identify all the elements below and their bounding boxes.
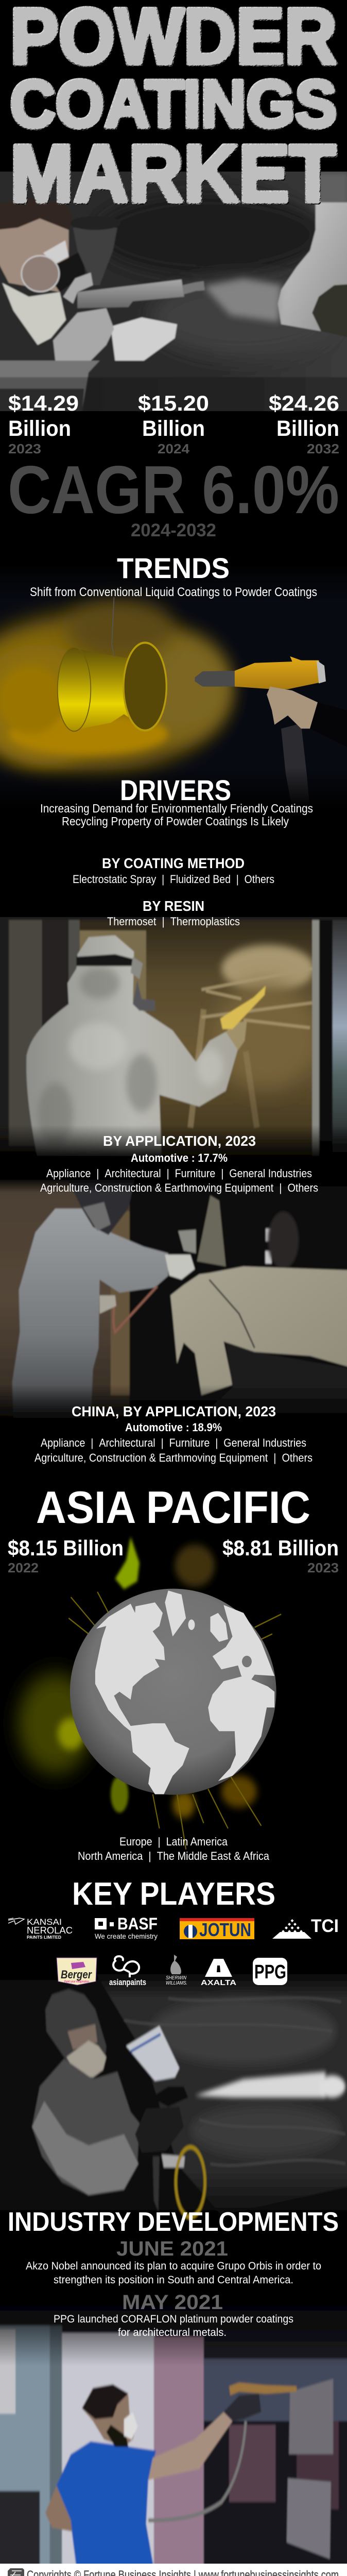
logo: BASF: We create chemistry [95,1932,158,1940]
market value 2032: Billion [276,416,339,441]
mauve wall [154,2336,204,2568]
nozzle [183,281,205,294]
logo: Kansai Nerolac: NEROLAC [27,1925,73,1936]
dark booth [204,2421,347,2568]
gloved hand [165,1255,195,1280]
booth interior [80,920,312,1157]
photo: yellow wheel rim and powder gun [0,580,347,802]
Asia Pacific heading: ASIA PACIFIC [36,1482,310,1533]
sleeve highlight [32,2101,138,2195]
beard [106,2425,128,2447]
logo: Sherwin-Williams: SHERWIN [166,1975,187,1981]
logo: Berger [57,1958,97,1985]
by resin [107,898,240,928]
low hand [100,1295,116,1314]
powder gun [220,986,266,1029]
China by application [34,1403,313,1464]
gun cup [126,2026,179,2081]
regions: North America | The Middle East & Africa [78,1850,270,1862]
shelves [0,2491,40,2568]
suit torso [32,2059,140,2195]
spray jet [195,2072,325,2097]
goggles [131,957,143,979]
hopper lid [71,220,112,230]
fade bottom [0,768,347,809]
China by application: CHINA, BY APPLICATION, 2023 [72,1403,276,1419]
fade top [0,2293,347,2366]
logo: Berger: Berger [61,1968,92,1981]
rails [190,969,312,1128]
globe sphere [70,1589,276,1795]
rim left flange [58,647,91,731]
logo: PPG: PPG [254,1961,286,1983]
Asia Pacific 2023 [222,1536,339,1575]
development June 2021: JUNE 2021 [116,2238,228,2260]
logo: Berger: Paint your imagination [64,1980,89,1984]
regions: Europe | Latin America [119,1835,228,1848]
gun body [235,656,325,689]
China by application: Automotive : 18.9% [125,1421,222,1434]
left wall [0,2326,62,2568]
development May 2021: PPG launched CORAFLON platinum powder coatings [54,2313,293,2325]
low glove and hose [162,2155,185,2167]
development May 2021: for architectural metals. [118,2327,227,2338]
title [10,0,337,219]
respirator [66,2041,106,2077]
body of worker [12,1209,168,1418]
driver text [40,802,313,828]
logo: Sherwin-Williams: WILLIAMS. [166,1980,187,1986]
logo: Kansai Nerolac: PAINTS LIMITED [27,1935,61,1940]
hood [45,1989,106,2079]
car pillar [197,1195,226,1266]
logo: Jotun [180,1918,254,1940]
by application 2023 [46,1133,312,1180]
panel gap [209,1280,254,1348]
hook wire [112,597,114,656]
gun nose [195,671,235,687]
logo: BASF: BASF [117,1914,158,1933]
by application 2023: Automotive : 17.7% [131,1151,228,1164]
jacket lower [0,361,100,411]
respirator [55,253,85,292]
logo: Axalta [201,1959,236,1987]
market value 2024: $15.20 [138,391,209,415]
white wall [62,2333,155,2568]
mask [124,2412,137,2439]
by resin: Thermoset | Thermoplastics [107,915,240,928]
photo: man in blue shirt with powder gun [0,2293,347,2568]
market value 2023 [8,391,79,456]
respirator [133,980,155,1011]
development May 2021: MAY 2021 [122,2291,223,2314]
metal panel [278,202,347,331]
market value 2024: Billion [142,416,205,441]
cloth [111,317,177,361]
handle and hose [281,723,312,834]
back glove [63,273,93,303]
gun hose [148,2421,246,2520]
footer logo [8,2568,24,2576]
market value 2024 [138,391,209,456]
logo: Sherwin-Williams [166,1955,187,1986]
development June 2021 [26,2238,321,2286]
face [67,2024,97,2050]
market value 2024: 2024 [158,441,190,456]
suit folds [38,968,157,1146]
head and respirator [66,1177,135,1235]
market value 2023: 2023 [8,441,41,456]
gun body [77,279,184,308]
by coating method: Electrostatic Spray | Fluidized Bed | Others [73,873,274,886]
hose [111,1286,157,1332]
logo: Kansai Nerolac: KANSAI [27,1917,62,1927]
drivers heading: DRIVERS [120,774,231,806]
wheel arch [199,1343,347,1418]
suit [26,935,238,1159]
market value 2032: $24.26 [269,391,339,415]
logo: Axalta: AXALTA [201,1978,236,1987]
logo: TCI: TCI [311,1916,339,1936]
by coating method: BY COATING METHOD [102,855,245,871]
shop wall [0,1177,130,1421]
globe with paint splash [18,1537,281,1850]
photo: hooded painter with cup gun [0,1969,347,2233]
market value 2032 [269,391,339,456]
regions [78,1835,270,1862]
China by application: Agriculture, Construction & Earthmoving Equipment | Others [34,1451,313,1464]
market value 2023: $14.29 [8,391,79,415]
blurred windows [266,1228,272,1242]
hung plates [289,2379,333,2454]
hair [17,218,51,227]
photo: white-suit worker in booth [0,915,347,1159]
market value 2032: 2032 [307,441,339,456]
back arm [45,2485,72,2531]
by resin: BY RESIN [143,898,204,914]
photo: gray overalls painter and car [0,1177,347,1421]
key players heading: KEY PLAYERS [72,1876,275,1912]
application segments line 2: Agriculture, Construction & Earthmoving Equipment | Others [40,1181,318,1194]
Asia Pacific 2023: 2023 [307,1560,339,1575]
photo: worker with hopper spray gun [0,168,347,416]
driver text: Increasing Demand for Environmentally Friendly Coatings [40,802,313,815]
logo: Jotun: JOTUN [199,1919,251,1940]
car body [170,1266,347,1395]
hair [82,2384,128,2419]
Asia Pacific 2023: $8.81 Billion [222,1536,339,1560]
fade top [0,562,347,603]
Asia Pacific 2022: 2022 [8,1560,39,1575]
development June 2021: strengthen its position in South and Central America. [54,2274,293,2286]
by coating method [73,855,274,886]
China by application: Appliance | Architectural | Furniture | General Industries [41,1436,306,1449]
development June 2021: Akzo Nobel announced its plan to acquire Grupo Orbis in order to [26,2260,321,2272]
by application 2023: BY APPLICATION, 2023 [103,1133,256,1149]
head [82,2384,137,2447]
logo: Kansai Nerolac [8,1917,73,1940]
dark wheel [312,284,347,338]
footer [0,2564,347,2576]
steel strip [312,920,319,1157]
white mask [43,240,68,264]
trends heading: TRENDS [117,552,230,584]
filter disc [22,256,59,292]
gun [229,2382,297,2395]
glove [223,2394,261,2421]
hopper [73,228,117,285]
yellow hose [176,2147,205,2217]
black sea [242,1656,252,1667]
by application 2023: Appliance | Architectural | Furniture | General Industries [46,1167,312,1180]
market value 2023: Billion [8,416,71,441]
rim barrel [74,649,142,730]
CAGR period: 2024-2032 [131,520,216,540]
powder cloud [221,945,315,992]
Asia Pacific 2022: $8.15 Billion [8,1536,124,1560]
driver text: Recycling Property of Powder Coatings Is Likely [62,815,289,828]
t-shirt [2,283,66,345]
suit highlights [68,1023,223,1086]
sleeve [310,702,347,747]
face [0,218,68,292]
jacket [51,319,67,338]
glove [53,308,114,361]
gloves [135,2107,184,2153]
spray cup [178,1230,196,1253]
rim face [124,642,166,731]
gun back cap [317,660,326,684]
logo: TCI [272,1916,339,1939]
hand [267,687,318,728]
paint splash [18,1537,281,1850]
development May 2021 [54,2291,293,2338]
blue shirt [57,2442,156,2568]
arm [148,2410,233,2480]
powder cloud [0,613,230,771]
hood strap [76,954,135,966]
continents [95,1590,274,1794]
logo: PPG [253,1958,287,1985]
Asia Pacific 2022 [8,1536,124,1575]
glove [226,1021,247,1050]
upper panel [204,2359,347,2421]
spray cloud [204,278,281,322]
logo: Asian Paints [109,1956,146,1987]
logo: BASF [95,1914,158,1940]
logo: Asian Paints: asianpaints [109,1977,146,1987]
plastic sheeting [95,1973,347,2215]
